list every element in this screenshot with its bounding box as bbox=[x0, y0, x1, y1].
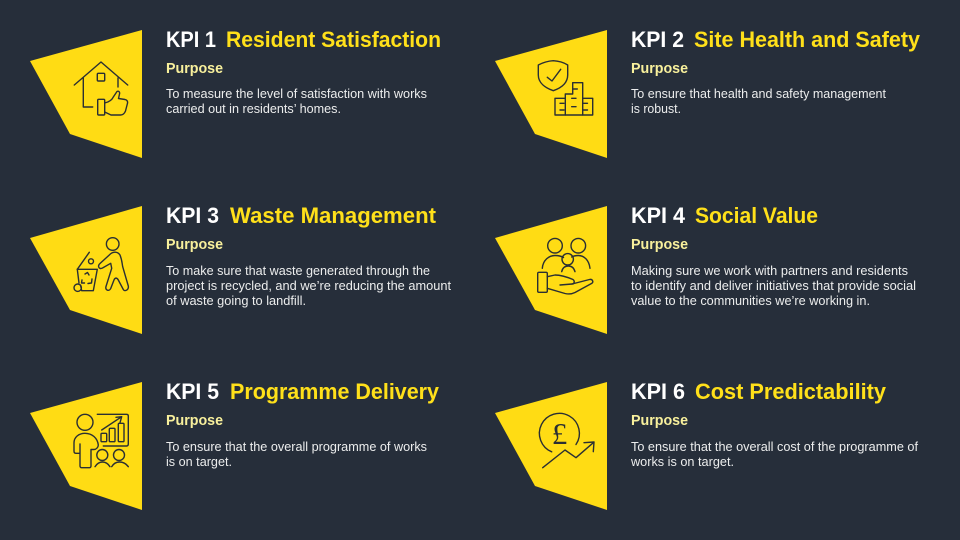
heading KPI 1: Resident Satisfaction bbox=[226, 27, 441, 52]
text: KPI 3 purpose: of waste going to landfill. bbox=[166, 294, 306, 308]
heading KPI 5: KPI 5 bbox=[166, 379, 219, 404]
heading KPI 4: KPI 4 bbox=[631, 203, 686, 228]
subheading purpose KPI 4: Purpose bbox=[631, 237, 688, 253]
icon: shield and buildings bbox=[538, 61, 593, 115]
icon: person putting waste in recycling bin bbox=[74, 238, 128, 291]
text: KPI 4 purpose: to identify and deliver initiatives that provide social bbox=[631, 279, 916, 293]
text: KPI 1 purpose: To measure the level of satisfaction with works bbox=[166, 87, 427, 101]
icon: house with thumbs up bbox=[74, 62, 128, 115]
heading KPI 6: Cost Predictability bbox=[695, 379, 887, 404]
icon: pound coin with rising arrow: £ bbox=[552, 416, 567, 451]
text: KPI 6 purpose: works is on target. bbox=[630, 455, 734, 469]
text: KPI 5 purpose: is on target. bbox=[166, 455, 232, 469]
subheading purpose KPI 1: Purpose bbox=[166, 61, 223, 77]
text: KPI 5 purpose: To ensure that the overall programme of works bbox=[166, 440, 427, 454]
text: KPI 4 purpose bbox=[631, 264, 916, 308]
panel: KPI 4 Social Value bbox=[495, 203, 916, 334]
text: KPI 2 purpose: To ensure that health and safety management bbox=[631, 87, 887, 101]
heading KPI 2: Site Health and Safety bbox=[694, 27, 921, 52]
text: KPI 3 purpose bbox=[166, 264, 452, 308]
subheading purpose KPI 5: Purpose bbox=[166, 413, 223, 429]
panel: KPI 1 Resident Satisfaction bbox=[30, 27, 441, 158]
heading KPI 3: KPI 3 bbox=[166, 203, 219, 228]
heading KPI 1: KPI 1 bbox=[166, 27, 216, 52]
yellow shape KPI 1 bbox=[30, 30, 142, 158]
text: KPI 4 purpose: value to the communities we’re working in. bbox=[631, 294, 870, 308]
panel: KPI 3 Waste Management bbox=[30, 203, 452, 334]
yellow shape KPI 2 bbox=[495, 30, 607, 158]
subheading purpose KPI 6: Purpose bbox=[631, 413, 688, 429]
text: KPI 2 purpose: is robust. bbox=[631, 102, 681, 116]
subheading purpose KPI 3: Purpose bbox=[166, 237, 223, 253]
subheading purpose KPI 2: Purpose bbox=[631, 61, 688, 77]
text: KPI 2 purpose bbox=[631, 87, 887, 116]
text: KPI 3 purpose: project is recycled, and we’re reducing the amount bbox=[166, 279, 452, 293]
heading KPI 3: Waste Management bbox=[230, 203, 437, 228]
icon: presenter with chart and audience bbox=[74, 414, 128, 468]
text: KPI 1 purpose bbox=[166, 87, 427, 116]
heading KPI 4 bbox=[631, 203, 818, 228]
yellow shape KPI 6 bbox=[495, 382, 607, 510]
text: KPI 6 purpose bbox=[630, 440, 919, 469]
panel: KPI 5 Programme Delivery bbox=[30, 379, 440, 510]
icon: pound coin with rising arrow bbox=[539, 413, 594, 468]
yellow shape KPI 5 bbox=[30, 382, 142, 510]
text: KPI 5 purpose bbox=[166, 440, 427, 469]
heading KPI 6: KPI 6 bbox=[631, 379, 685, 404]
heading KPI 5: Programme Delivery bbox=[230, 379, 440, 404]
panel: KPI 2 Site Health and Safety bbox=[495, 27, 921, 158]
icon: hand holding people bbox=[538, 238, 593, 294]
heading KPI 2: KPI 2 bbox=[631, 27, 684, 52]
text: KPI 1 purpose: carried out in residents’ homes. bbox=[166, 102, 341, 116]
panel: KPI 6 Cost Predictability bbox=[495, 379, 919, 510]
yellow shape KPI 3 bbox=[30, 206, 142, 334]
text: KPI 6 purpose: To ensure that the overall cost of the programme of bbox=[631, 440, 919, 454]
text: KPI 4 purpose: Making sure we work with partners and residents bbox=[631, 264, 908, 278]
heading KPI 4: Social Value bbox=[695, 203, 818, 228]
yellow shape KPI 4 bbox=[495, 206, 607, 334]
text: KPI 3 purpose: To make sure that waste generated through the bbox=[166, 264, 430, 278]
